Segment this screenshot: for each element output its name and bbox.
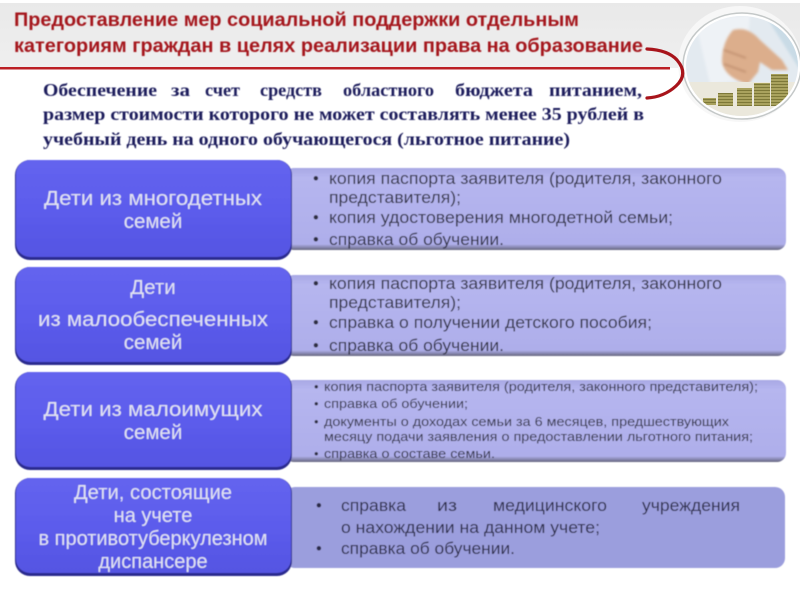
panel: малоимущие documents: • — [314, 396, 319, 411]
panel: малоимущие documents: справка о составе семьи. — [324, 446, 495, 461]
panel: диспансер documents: • — [316, 540, 322, 558]
panel: диспансер documents — [285, 487, 785, 568]
category: противотуберкулезный диспансер: Дети, состоящие — [74, 482, 232, 504]
photo: hand stacking coins — [678, 6, 800, 122]
panel: малообеспеченные documents: • — [313, 275, 319, 293]
panel: многодетные documents: • — [313, 170, 319, 188]
category: многодетные: Дети из многодетных — [44, 187, 263, 210]
panel: малообеспеченные documents: • — [313, 314, 319, 332]
panel: малоимущие documents: • — [314, 379, 319, 394]
panel: диспансер documents: медицинского — [493, 497, 607, 515]
intro text: размер стоимости которого не может составлять менее 35 рублей в — [43, 104, 644, 124]
category: малообеспеченные — [15, 267, 292, 365]
panel: многодетные documents — [285, 168, 786, 250]
category: противотуберкулезный диспансер: на учете — [114, 505, 192, 527]
intro text: областного — [343, 80, 434, 100]
panel: многодетные documents: копия удостоверения многодетной семьи; — [329, 209, 673, 227]
intro text: учебный день на одного обучающегося (льготное питание) — [43, 129, 570, 149]
intro text: средств — [260, 80, 322, 100]
category: малоимущие — [15, 372, 292, 470]
intro text — [43, 80, 644, 149]
panel: малоимущие documents: месяцу подачи заявления о предоставлении льготного питания; — [324, 429, 753, 444]
intro text: питанием, — [549, 80, 642, 100]
red bracket connector — [647, 49, 683, 98]
category: малообеспеченные: семей — [124, 331, 182, 354]
panel: многодетные documents: копия паспорта заявителя (родителя, законного — [329, 170, 722, 188]
panel: многодетные documents: справка об обучении. — [329, 231, 504, 249]
title — [14, 10, 643, 57]
panel: малоимущие documents: копия паспорта заявителя (родителя, законного представителя); — [324, 379, 758, 394]
category: многодетные — [15, 160, 292, 260]
title: категориям граждан в целях реализации права на образование — [14, 36, 643, 57]
panel: многодетные documents: • — [313, 209, 319, 227]
panel: малообеспеченные documents: представителя); — [329, 294, 461, 312]
panel: диспансер documents: • — [316, 497, 322, 515]
panel: многодетные documents: • — [313, 231, 319, 249]
category: малообеспеченные: Дети — [130, 276, 176, 299]
category: противотуберкулезный диспансер: в противотуберкулезном — [38, 528, 268, 550]
panel: малообеспеченные documents: копия паспорта заявителя (родителя, законного — [329, 275, 722, 293]
category: противотуберкулезный диспансер: диспансере — [98, 551, 208, 573]
intro text: Обеспечение — [43, 80, 157, 100]
panel: малоимущие documents: справка об обучении; — [324, 396, 468, 411]
panel: малоимущие documents: документы о доходах семьи за 6 месяцев, предшествующих — [324, 414, 730, 429]
panel: диспансер documents: справка об обучении. — [341, 540, 515, 558]
panel: диспансер documents: о нахождении на данном учете; — [341, 519, 600, 537]
panel: малоимущие documents: • — [314, 446, 319, 461]
intro text: счет — [205, 80, 240, 100]
panel: диспансер documents: учреждения — [642, 497, 740, 515]
intro text: за — [171, 80, 190, 100]
category: малоимущие: Дети из малоимущих — [44, 398, 263, 421]
category: многодетные: семей — [124, 210, 182, 233]
panel: малообеспеченные documents: справка о получении детского пособия; — [329, 314, 652, 332]
panel: многодетные documents: представителя); — [329, 189, 461, 207]
panel: диспансер documents: из — [437, 497, 457, 515]
category: малообеспеченные: из малообеспеченных — [38, 308, 269, 331]
category: противотуберкулезный диспансер — [15, 478, 292, 576]
panel: диспансер documents: справка — [341, 497, 407, 515]
panel: малообеспеченные documents: • — [313, 337, 319, 355]
panel: малоимущие documents: • — [314, 414, 319, 429]
header band — [0, 3, 800, 70]
title: Предоставление мер социальной поддержки отдельным — [14, 10, 579, 31]
intro text: бюджета — [455, 80, 533, 100]
category: малоимущие: семей — [124, 421, 182, 444]
panel: малообеспеченные documents — [285, 275, 786, 356]
panel: малообеспеченные documents: справка об обучении. — [329, 337, 504, 355]
panel: малоимущие documents — [285, 379, 786, 462]
